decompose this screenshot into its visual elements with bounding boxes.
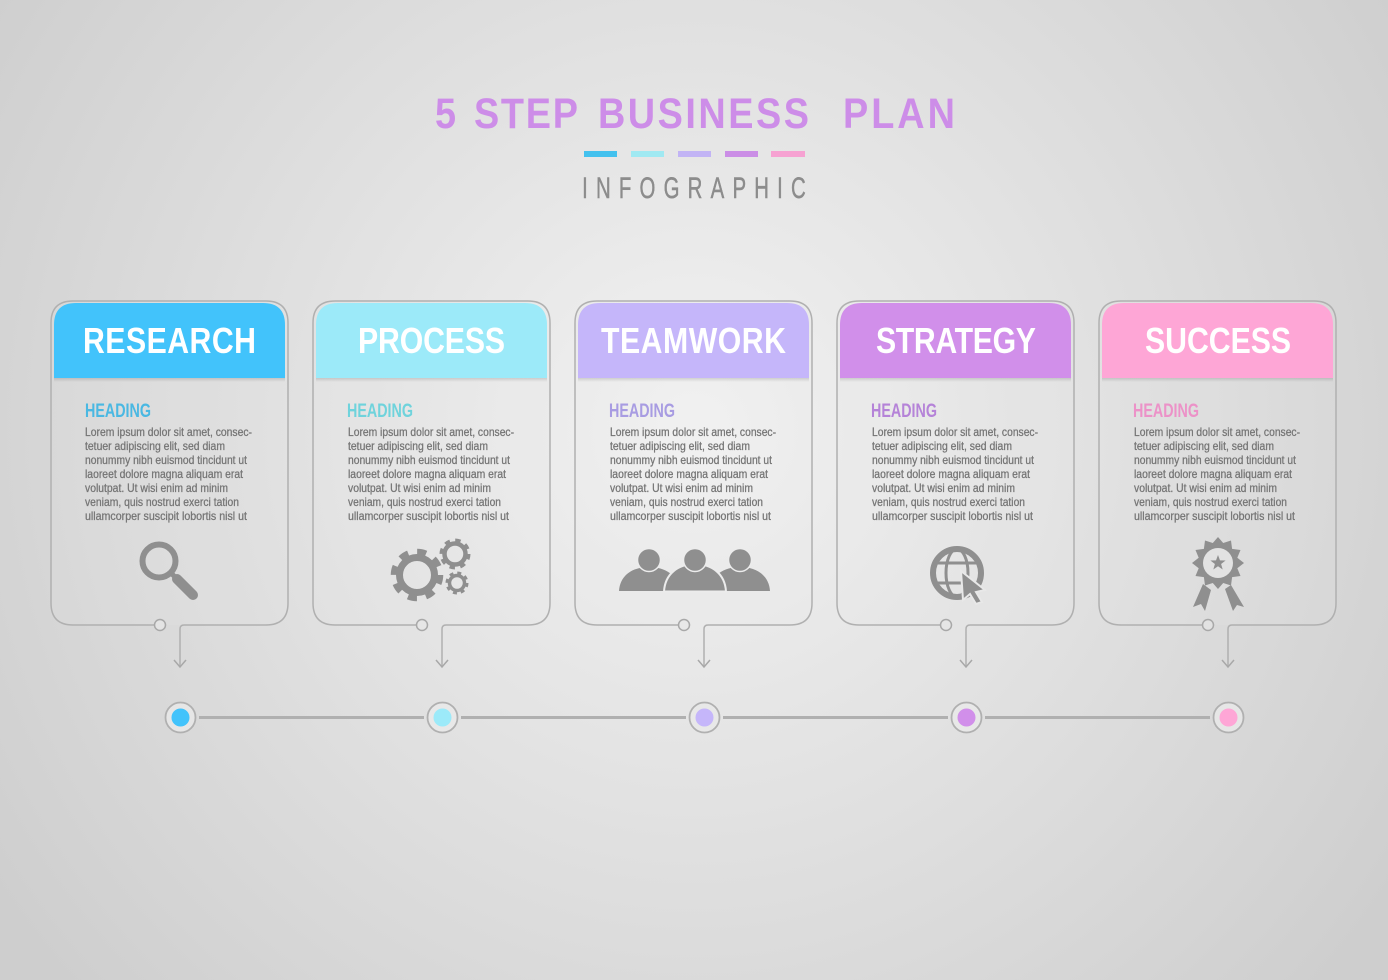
- body text: success: veniam, quis nostrud exerci tation: [1134, 495, 1287, 509]
- colour bar legend: [584, 151, 805, 157]
- body text: success: ullamcorper suscipit lobortis nisl ut: [1134, 509, 1296, 523]
- header label: process: PROCESS: [358, 322, 505, 362]
- body text: teamwork: tetuer adipiscing elit, sed diam: [610, 439, 750, 453]
- icon: globe with cursor: [933, 549, 985, 604]
- connector dot: [416, 620, 428, 630]
- heading: strategy: HEADING: [871, 400, 937, 422]
- body text: strategy: laoreet dolore magna aliquam erat: [872, 467, 1031, 481]
- arrow head: [174, 660, 186, 667]
- body text: research: nonummy nibh euismod tincidunt ut: [85, 453, 248, 467]
- body text: research: ullamcorper suscipit lobortis nisl ut: [85, 509, 248, 523]
- body text: process: volutpat. Ut wisi enim ad minim: [348, 481, 491, 495]
- body text: success: Lorem ipsum dolor sit amet, consec-: [1134, 425, 1300, 439]
- body text: teamwork: Lorem ipsum dolor sit amet, consec-: [610, 425, 776, 439]
- body text: research: laoreet dolore magna aliquam erat: [85, 467, 244, 481]
- header label: teamwork: TEAMWORK: [601, 322, 786, 362]
- body text: teamwork: volutpat. Ut wisi enim ad minim: [610, 481, 753, 495]
- body text: success: laoreet dolore magna aliquam erat: [1134, 467, 1293, 481]
- body text: process: veniam, quis nostrud exerci tation: [348, 495, 501, 509]
- timeline node 5: [1214, 702, 1244, 732]
- header: success: [1102, 303, 1333, 378]
- body text: research: tetuer adipiscing elit, sed diam: [85, 439, 225, 453]
- body text: process: laoreet dolore magna aliquam erat: [348, 467, 507, 481]
- icon: gears: [394, 540, 468, 598]
- body text: teamwork: nonummy nibh euismod tincidunt ut: [610, 453, 773, 467]
- body text: process: tetuer adipiscing elit, sed diam: [348, 439, 488, 453]
- heading: research: HEADING: [85, 400, 151, 422]
- timeline node 4: [952, 702, 982, 732]
- header label: strategy: STRATEGY: [876, 322, 1036, 362]
- connector dot: [678, 620, 690, 630]
- title: PLAN: [843, 89, 955, 138]
- arrow head: [698, 660, 710, 667]
- panel: success: [1099, 301, 1336, 667]
- body text: process: nonummy nibh euismod tincidunt ut: [348, 453, 511, 467]
- panel: teamwork: [575, 301, 812, 667]
- header: teamwork: [578, 303, 809, 378]
- panel: strategy: [837, 301, 1074, 667]
- header label: research: RESEARCH: [83, 322, 256, 362]
- body text: success: nonummy nibh euismod tincidunt ut: [1134, 453, 1297, 467]
- connector dot: [154, 620, 166, 630]
- arrow head: [1222, 660, 1234, 667]
- icon: award badge: [1192, 537, 1244, 611]
- panel: research: [51, 301, 288, 667]
- timeline node 2: [428, 702, 458, 732]
- arrow head: [960, 660, 972, 667]
- body text: strategy: tetuer adipiscing elit, sed diam: [872, 439, 1012, 453]
- body text: process: ullamcorper suscipit lobortis nisl ut: [348, 509, 510, 523]
- panel: process: [313, 301, 550, 667]
- body text: research: volutpat. Ut wisi enim ad minim: [85, 481, 228, 495]
- body text: research: Lorem ipsum dolor sit amet, consec-: [85, 425, 252, 439]
- body text: process: Lorem ipsum dolor sit amet, consec-: [348, 425, 514, 439]
- connector dot: [940, 620, 952, 630]
- connector dot: [1202, 620, 1214, 630]
- icon: team of people: [619, 548, 770, 592]
- header: strategy: [840, 303, 1071, 378]
- body text: success: volutpat. Ut wisi enim ad minim: [1134, 481, 1277, 495]
- body text: teamwork: veniam, quis nostrud exerci tation: [610, 495, 763, 509]
- title: 5: [435, 89, 456, 138]
- header: process: [316, 303, 547, 378]
- title: STEP: [474, 89, 578, 138]
- subtitle: INFOGRAPHIC: [582, 172, 806, 205]
- body text: strategy: volutpat. Ut wisi enim ad minim: [872, 481, 1015, 495]
- header: research: [54, 303, 285, 378]
- title: BUSINESS: [598, 89, 809, 138]
- arrow head: [436, 660, 448, 667]
- body text: strategy: Lorem ipsum dolor sit amet, consec-: [872, 425, 1038, 439]
- timeline: [166, 702, 1244, 732]
- body text: strategy: ullamcorper suscipit lobortis nisl ut: [872, 509, 1034, 523]
- body text: strategy: nonummy nibh euismod tincidunt ut: [872, 453, 1035, 467]
- timeline node 3: [690, 702, 720, 732]
- body text: teamwork: ullamcorper suscipit lobortis nisl ut: [610, 509, 772, 523]
- timeline node 1: [166, 702, 196, 732]
- header label: success: SUCCESS: [1145, 322, 1291, 362]
- icon: magnifier: [142, 544, 193, 595]
- body text: teamwork: laoreet dolore magna aliquam erat: [610, 467, 769, 481]
- heading: teamwork: HEADING: [609, 400, 675, 422]
- heading: process: HEADING: [347, 400, 413, 422]
- body text: success: tetuer adipiscing elit, sed diam: [1134, 439, 1274, 453]
- heading: success: HEADING: [1133, 400, 1199, 422]
- body text: research: veniam, quis nostrud exerci tation: [85, 495, 239, 509]
- body text: strategy: veniam, quis nostrud exerci tation: [872, 495, 1025, 509]
